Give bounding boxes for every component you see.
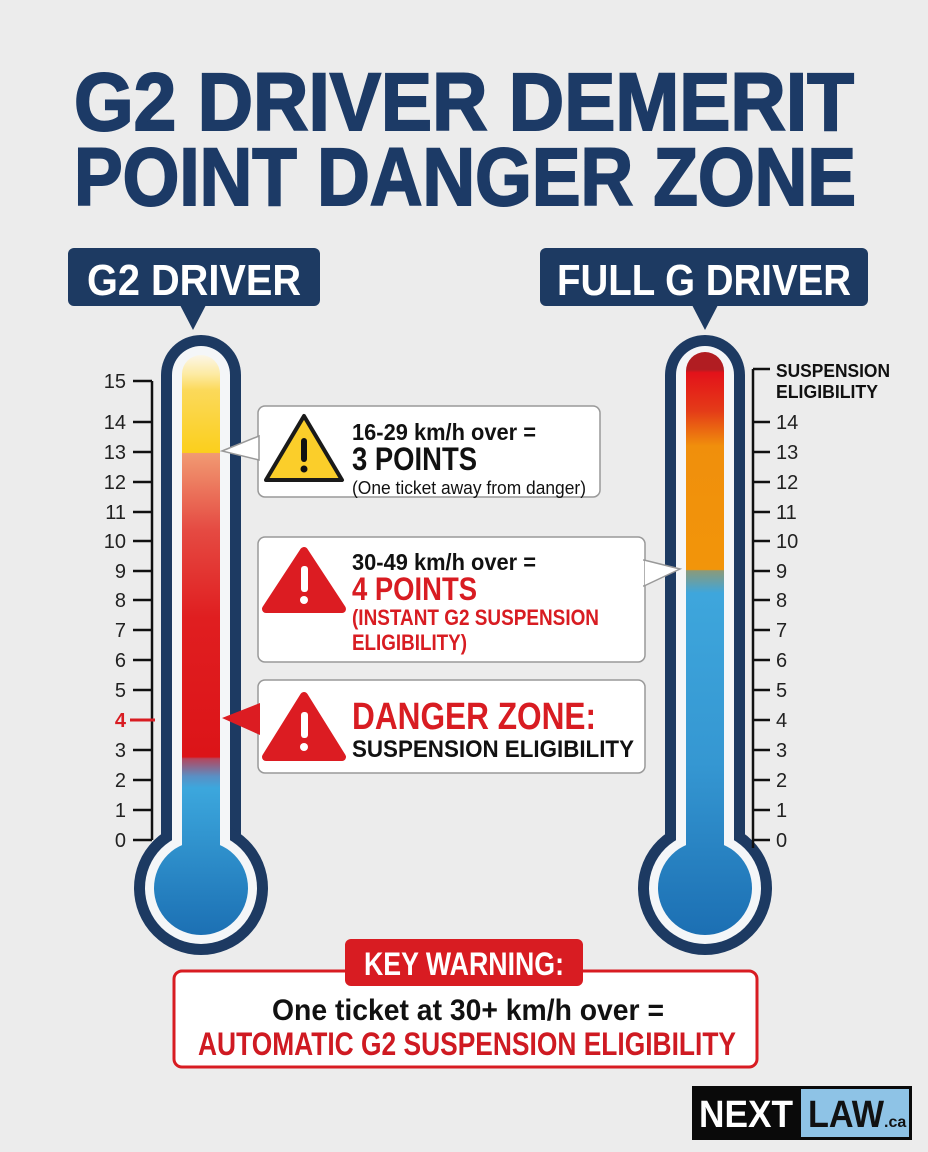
badge: FULL G DRIVER [540, 248, 868, 330]
scale: full G driver: 1 [776, 800, 787, 822]
scale: G2 driver: 7 [115, 620, 126, 642]
title [74, 57, 856, 223]
callout: 4 points: 4 POINTS [352, 571, 477, 607]
scale: G2 driver: 4 [115, 710, 127, 732]
scale: G2 driver: 8 [115, 590, 126, 612]
label: suspension eligibility: SUSPENSION [776, 361, 890, 381]
title: POINT DANGER ZONE [74, 132, 856, 223]
scale: full G driver: 12 [776, 472, 798, 494]
scale: full G driver: 13 [776, 442, 798, 464]
label: suspension eligibility [776, 361, 890, 402]
callout: 3 points [222, 406, 600, 498]
label: suspension eligibility: ELIGIBILITY [776, 382, 878, 402]
scale: G2 driver [104, 371, 155, 852]
scale: full G driver: 2 [776, 770, 787, 792]
title: G2 DRIVER DEMERIT [74, 57, 854, 148]
scale: full G driver: 3 [776, 740, 787, 762]
scale: full G driver: 14 [776, 412, 798, 434]
scale: full G driver [753, 369, 798, 852]
callout: 3 points: 3 POINTS [352, 441, 477, 477]
badge: G2 DRIVER [68, 248, 320, 330]
logo: NEXT LAW.ca: NEXT [699, 1094, 793, 1136]
scale: G2 driver: 0 [115, 830, 126, 852]
callout: danger zone [222, 680, 645, 773]
scale: G2 driver: 3 [115, 740, 126, 762]
scale: full G driver: 5 [776, 680, 787, 702]
callout: 4 points: ELIGIBILITY) [352, 630, 467, 655]
scale: G2 driver: 10 [104, 531, 126, 553]
scale: G2 driver: 6 [115, 650, 126, 672]
scale: G2 driver: 2 [115, 770, 126, 792]
callout: 4 points: 30-49 km/h over = [352, 549, 536, 575]
scale: G2 driver: 15 [104, 371, 126, 393]
scale: full G driver: 10 [776, 531, 798, 553]
scale: G2 driver: 11 [105, 502, 126, 524]
thermometer: full G driver [638, 335, 772, 955]
scale: full G driver: 7 [776, 620, 787, 642]
scale: G2 driver: 1 [115, 800, 126, 822]
badge: G2 DRIVER: G2 DRIVER [87, 256, 301, 305]
scale: full G driver: 9 [776, 561, 787, 583]
logo: NEXT LAW.ca [692, 1086, 912, 1140]
callout: 4 points [258, 537, 680, 662]
scale: G2 driver: 9 [115, 561, 126, 583]
scale: G2 driver: 13 [104, 442, 126, 464]
scale: G2 driver: 14 [104, 412, 126, 434]
logo: NEXT LAW.ca: LAW [808, 1094, 884, 1136]
key warning label: KEY WARNING: [364, 946, 564, 982]
scale: G2 driver: 12 [104, 472, 126, 494]
callout: danger zone: SUSPENSION ELIGIBILITY [352, 736, 634, 763]
scale: full G driver: 11 [776, 502, 797, 524]
callout: 3 points: 16-29 km/h over = [352, 419, 536, 445]
callout: 4 points: (INSTANT G2 SUSPENSION [352, 605, 599, 630]
scale: G2 driver: 5 [115, 680, 126, 702]
key warning label [345, 939, 583, 986]
key warning box: AUTOMATIC G2 SUSPENSION ELIGIBILITY [198, 1026, 736, 1062]
icon: red warning [266, 551, 342, 609]
scale: full G driver: 8 [776, 590, 787, 612]
logo: NEXT LAW.ca: .ca [884, 1114, 906, 1131]
icon: red warning [266, 696, 342, 757]
key warning box: One ticket at 30+ km/h over = [272, 994, 664, 1027]
scale: full G driver: 6 [776, 650, 787, 672]
scale: full G driver: 0 [776, 830, 787, 852]
key warning box [174, 939, 757, 1067]
scale: full G driver: 4 [776, 710, 787, 732]
callout: 3 points: (One ticket away from danger) [352, 478, 586, 498]
callout: danger zone: DANGER ZONE: [352, 696, 596, 738]
thermometer: G2 driver [134, 335, 268, 955]
icon: yellow warning [266, 416, 342, 480]
badge: FULL G DRIVER: FULL G DRIVER [557, 256, 851, 305]
